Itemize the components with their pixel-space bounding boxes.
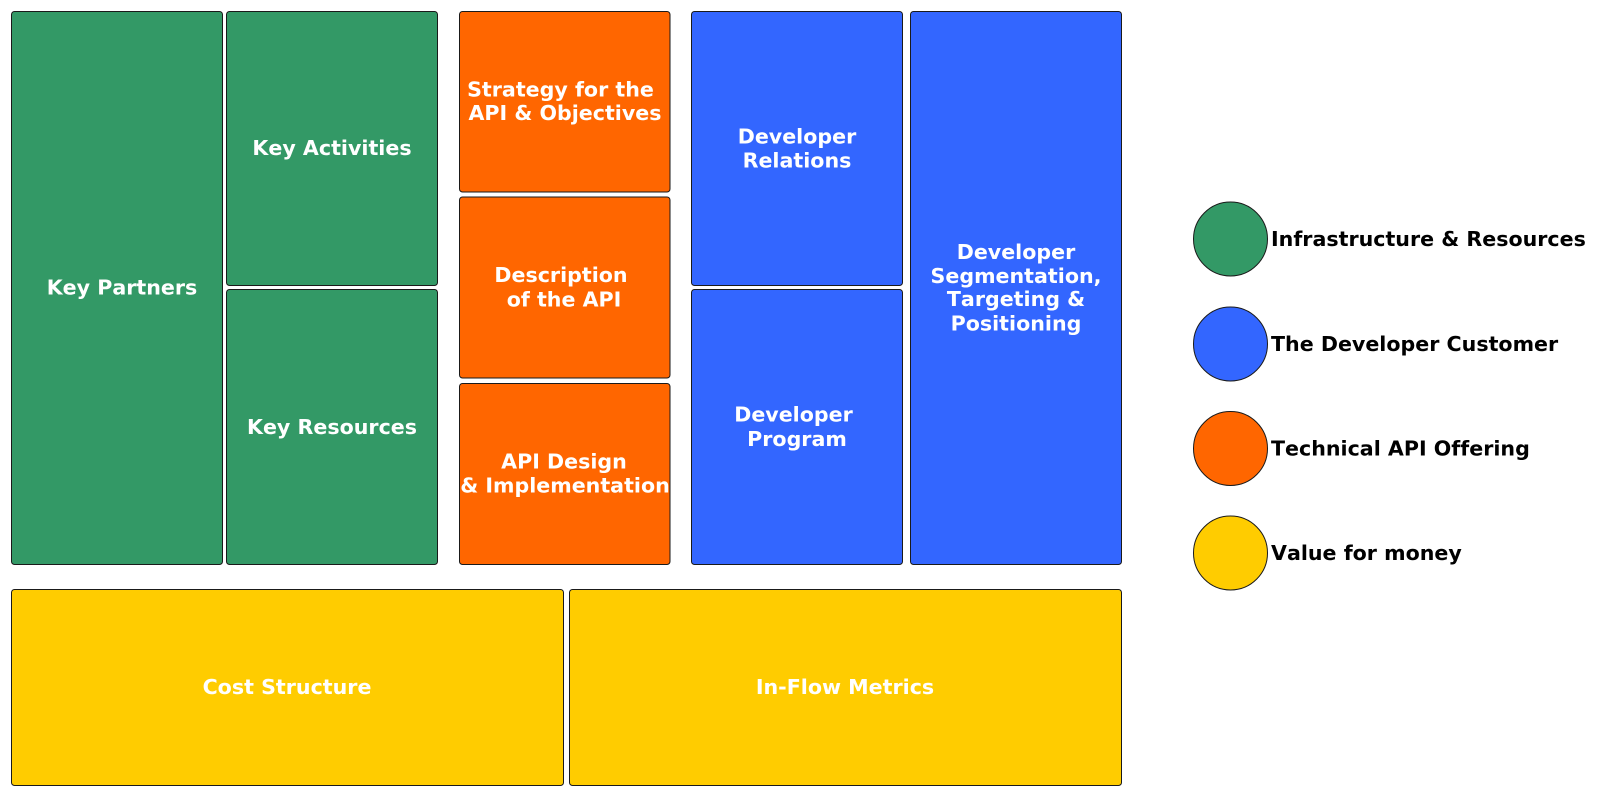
panel: Description of the API: of the API [507, 288, 621, 312]
panel: In-Flow Metrics: In-Flow Metrics [756, 675, 934, 699]
panel: API Design & Implementation: API Design [501, 449, 627, 473]
legend item: The Developer Customer: The Developer Customer [1271, 332, 1559, 356]
panel: Developer Segmentation, Targeting & Positioning: Developer [957, 240, 1076, 264]
panel: Strategy for the API & Objectives [460, 12, 670, 192]
panel: Cost Structure: Cost Structure [203, 675, 371, 699]
panel: Developer Relations: Relations [743, 148, 851, 172]
panel: Description of the API [460, 197, 670, 378]
panel: Developer Segmentation, Targeting & Positioning [910, 12, 1122, 564]
panel: In-Flow Metrics [570, 590, 1122, 786]
panel: Strategy for the API & Objectives: Strategy for the [467, 77, 654, 101]
legend item: Infrastructure & Resources: Infrastructure & Resources [1271, 227, 1586, 251]
panel: Developer Program [692, 290, 902, 564]
panel: Key Partners [12, 12, 222, 564]
legend item: The Developer Customer [1194, 307, 1559, 381]
panel: Description of the API: Description [494, 263, 628, 287]
panel: Developer Program: Developer [734, 402, 854, 426]
panel: Key Activities: Key Activities [252, 136, 412, 160]
panel: Key Partners: Key Partners [47, 276, 197, 300]
panel: Cost Structure [12, 590, 564, 786]
panel: Developer Program: Program [747, 427, 847, 451]
panel: API Design & Implementation: & Implementation [460, 473, 670, 497]
legend [1194, 202, 1586, 590]
panel: Developer Segmentation, Targeting & Positioning: Positioning [951, 312, 1081, 336]
panel: Strategy for the API & Objectives: API & Objectives [468, 101, 662, 125]
panel: Key Resources: Key Resources [247, 415, 417, 439]
legend item: Technical API Offering: Technical API Offering [1271, 436, 1530, 460]
legend item: Value for money: Value for money [1271, 541, 1462, 565]
panel: Developer Relations: Developer [738, 124, 857, 148]
panel: Key Resources [226, 290, 438, 564]
panel: Developer Segmentation, Targeting & Positioning: Segmentation, [931, 264, 1101, 288]
legend item: Technical API Offering [1194, 412, 1530, 486]
legend item: Value for money [1194, 516, 1462, 590]
panel: Developer Segmentation, Targeting & Positioning: Targeting & [947, 287, 1085, 311]
legend item: Infrastructure & Resources [1194, 202, 1586, 276]
panel: Developer Relations [692, 12, 902, 286]
panel: Key Activities [226, 12, 438, 286]
panel: API Design & Implementation [460, 384, 670, 564]
